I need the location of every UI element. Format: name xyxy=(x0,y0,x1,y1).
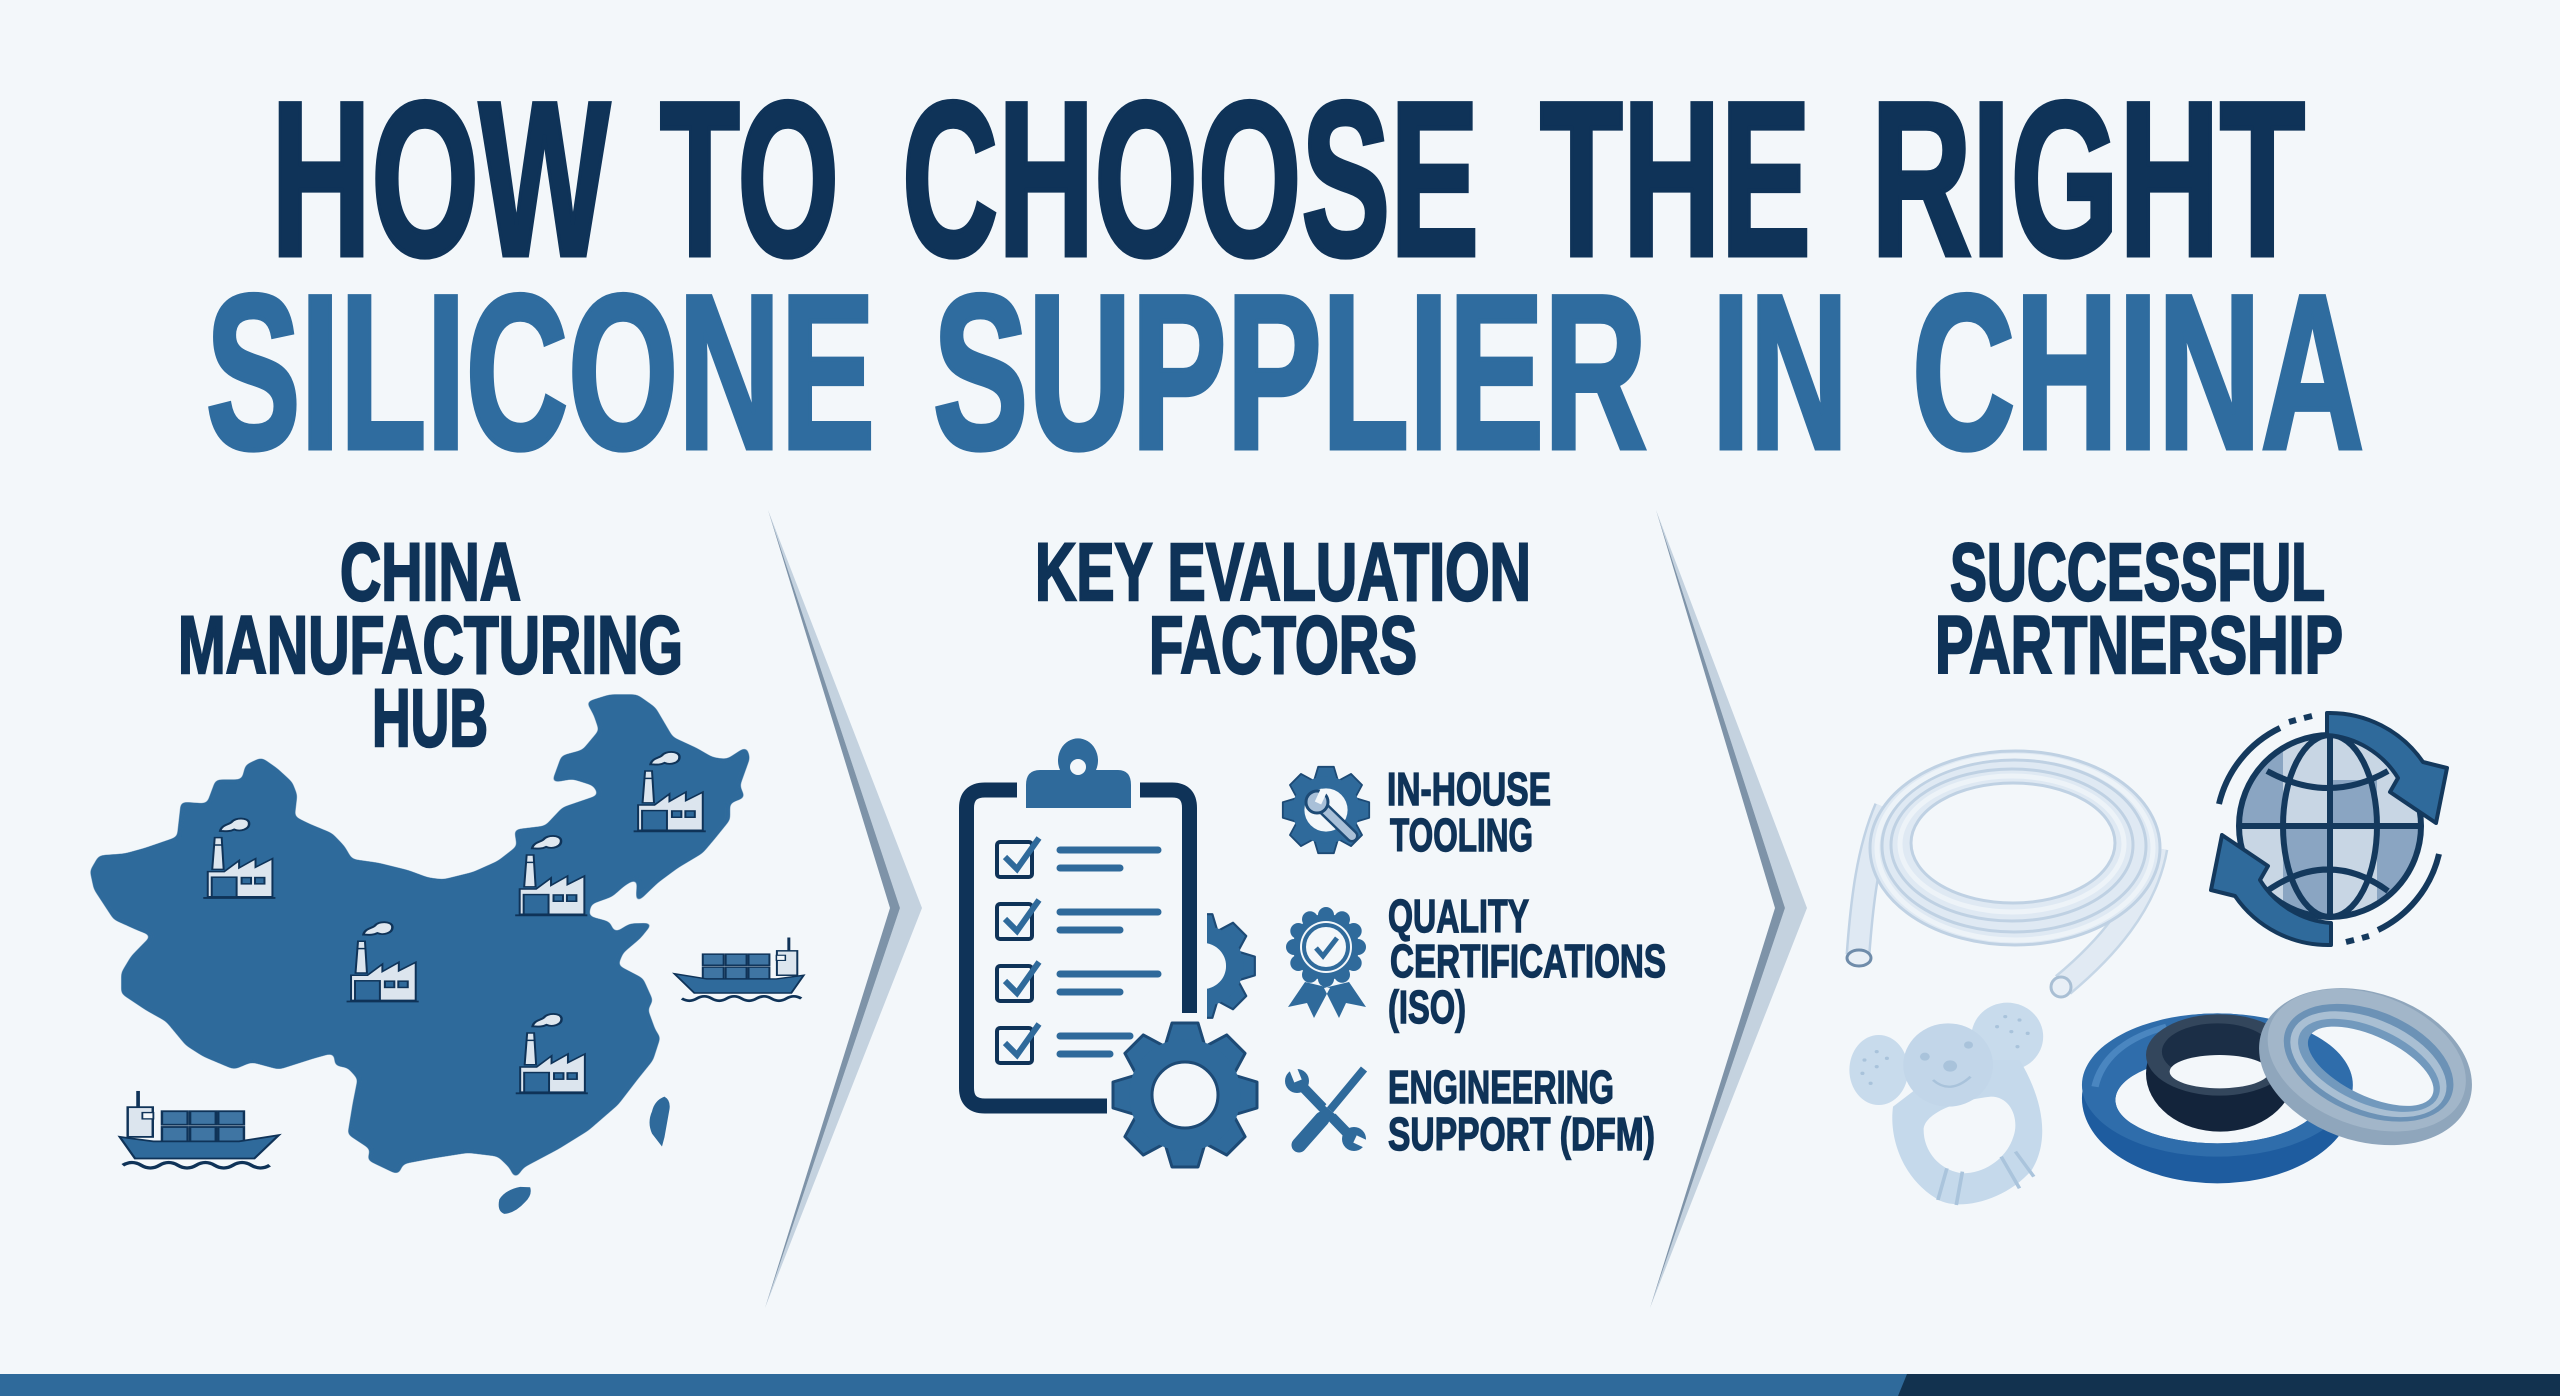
arrow: clockwise top right xyxy=(2327,713,2447,823)
icon: large gear xyxy=(1113,1023,1257,1167)
arrow: clockwise bottom left xyxy=(2211,835,2331,945)
globe xyxy=(2238,735,2422,917)
label: TOOLING xyxy=(1390,809,1533,861)
title: SILICONE xyxy=(206,249,875,495)
chevron divider 1 xyxy=(765,510,922,1308)
label: CERTIFICATIONS xyxy=(1390,935,1666,987)
seal: black ring xyxy=(2146,1014,2295,1132)
heading: successful partnership: SUCCESSFUL xyxy=(1950,527,2325,618)
heading: china manufacturing hub: MANUFACTURING xyxy=(178,600,683,691)
title xyxy=(206,56,2364,495)
title: HOW xyxy=(271,56,610,302)
map: mainland china xyxy=(90,694,750,1179)
map: hainan xyxy=(499,1187,531,1214)
label: ENGINEERING xyxy=(1388,1061,1614,1113)
dashed orbit top left xyxy=(2219,716,2312,804)
icon: half gear behind clipboard xyxy=(1207,913,1256,1019)
icon: globe with circular arrows xyxy=(2211,713,2447,945)
heading: key evaluation factors: FACTORS xyxy=(1149,600,1417,691)
heading: china manufacturing hub xyxy=(178,527,683,764)
icon: cargo ship south xyxy=(120,1091,279,1168)
seal: blue ring xyxy=(2082,1013,2353,1183)
label: QUALITY xyxy=(1388,890,1529,942)
heading: china manufacturing hub: CHINA xyxy=(340,527,521,618)
panel: china manufacturing hub xyxy=(90,527,804,1214)
heading: successful partnership: PARTNERSHIP xyxy=(1935,600,2343,691)
icon: factory north xyxy=(515,836,587,915)
heading: successful partnership xyxy=(1935,527,2343,691)
product: silicone seal rings xyxy=(2082,988,2472,1184)
label: IN-HOUSE xyxy=(1387,763,1551,815)
label xyxy=(1387,763,1551,861)
map of china with factories and ships xyxy=(90,694,804,1214)
label: SUPPORT (DFM) xyxy=(1388,1108,1655,1160)
globe grid xyxy=(2239,735,2421,917)
title: TO xyxy=(660,56,839,302)
panel: successful partnership xyxy=(1847,527,2508,1205)
factor: engineering support xyxy=(1285,1061,1655,1160)
seal: gray ring xyxy=(2259,988,2472,1146)
icon: factory south xyxy=(516,1014,588,1093)
factor: quality certifications xyxy=(1286,890,1666,1033)
icon: factory west xyxy=(203,819,275,898)
title: IN xyxy=(1712,249,1848,495)
clipboard clip xyxy=(1026,738,1131,808)
title: CHOOSE xyxy=(902,56,1479,302)
title: SUPPLIER xyxy=(933,249,1647,495)
icon: rosette badge xyxy=(1286,907,1366,1018)
heading: china manufacturing hub: HUB xyxy=(372,673,488,764)
icon: cargo ship east xyxy=(674,938,804,1001)
product: coiled silicone tube xyxy=(1847,750,2161,997)
label: (ISO) xyxy=(1388,981,1466,1033)
product: koala baby teether xyxy=(1849,1003,2043,1205)
icon: gear with wrench xyxy=(1283,767,1369,853)
dashed orbit bottom right xyxy=(2346,854,2439,942)
chevron divider 2 xyxy=(1650,510,1807,1308)
title: THE xyxy=(1540,56,1811,302)
icon: factory central xyxy=(347,922,419,1002)
title: RIGHT xyxy=(1871,56,2305,302)
icon: checklist clipboard with gears xyxy=(966,738,1257,1167)
icon: factory northeast xyxy=(634,752,706,831)
icon: crossed wrench and screwdriver xyxy=(1285,1066,1370,1151)
map: taiwan xyxy=(650,1097,670,1147)
checklist rows xyxy=(997,838,1158,1063)
heading: key evaluation factors: KEY EVALUATION xyxy=(1035,527,1531,618)
factor: in-house tooling xyxy=(1283,763,1551,861)
label xyxy=(1388,1061,1655,1160)
label xyxy=(1388,890,1666,1033)
heading: key evaluation factors xyxy=(1035,527,1531,691)
panel: key evaluation factors xyxy=(966,527,1666,1167)
footer bar xyxy=(0,1374,2560,1396)
clipboard frame xyxy=(966,790,1190,1106)
